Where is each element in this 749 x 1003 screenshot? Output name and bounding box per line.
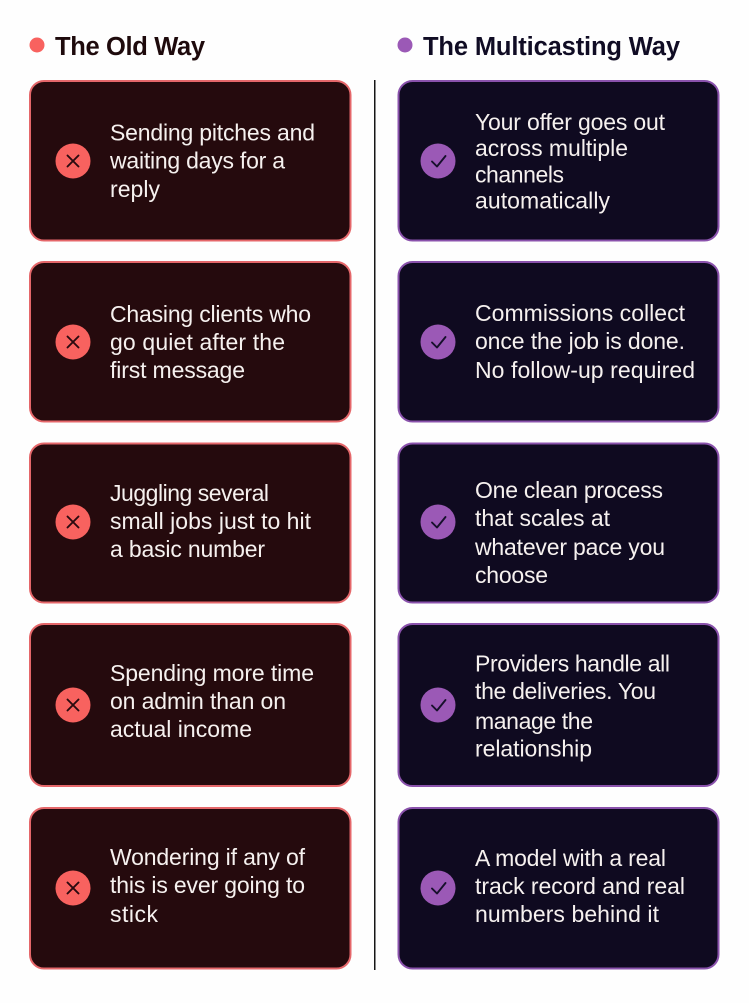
text: multicasting way 5: A model with a real bbox=[475, 845, 666, 871]
text: old way 3: Juggling several bbox=[110, 480, 269, 506]
text: multicasting way 1: automatically bbox=[475, 188, 610, 214]
panel: old way 3 bbox=[30, 444, 350, 602]
text: old way 1: Sending pitches and bbox=[110, 120, 315, 146]
icon: cross bbox=[56, 870, 90, 906]
text: multicasting way 5 bbox=[475, 845, 685, 927]
text: multicasting way 4: relationship bbox=[475, 736, 592, 762]
text: old way 2: go quiet after the bbox=[110, 329, 285, 355]
panel: multicasting way 5 bbox=[398, 808, 718, 968]
text: old way 3: small jobs just to hit bbox=[110, 508, 312, 534]
text: old way 3: a basic number bbox=[110, 536, 265, 562]
text: multicasting way 1: channels bbox=[475, 162, 564, 188]
text: old way 3 bbox=[110, 480, 312, 562]
heading: The Old Way: The Old Way bbox=[55, 33, 206, 61]
center divider line bbox=[374, 80, 376, 970]
heading: The Multicasting Way: The Multicasting Way bbox=[423, 33, 681, 61]
text: old way 4: on admin than on bbox=[110, 688, 286, 714]
panel: multicasting way 2 bbox=[398, 262, 718, 422]
text: multicasting way 1 bbox=[475, 109, 666, 214]
panel: multicasting way 4 bbox=[398, 624, 718, 786]
text: multicasting way 3: One clean process bbox=[475, 477, 663, 503]
text: old way 4 bbox=[110, 660, 314, 742]
text: multicasting way 3: choose bbox=[475, 562, 548, 588]
icon: check bbox=[420, 504, 456, 540]
icon: check bbox=[420, 688, 456, 722]
text: old way 5: stick bbox=[110, 901, 158, 927]
text: old way 4: actual income bbox=[110, 716, 252, 742]
text: old way 5: this is ever going to bbox=[110, 872, 305, 898]
text: multicasting way 2: Commissions collect bbox=[475, 300, 686, 326]
icon: check bbox=[420, 144, 456, 178]
text: old way 5 bbox=[110, 844, 306, 927]
icon: check bbox=[420, 870, 456, 906]
text: old way 2: Chasing clients who bbox=[110, 301, 311, 327]
text: multicasting way 2: once the job is done. bbox=[475, 328, 685, 354]
text: multicasting way 1: across multiple bbox=[475, 135, 628, 161]
text: old way 4: Spending more time bbox=[110, 660, 314, 686]
panel: multicasting way 1 bbox=[398, 81, 718, 240]
text: old way 2: first message bbox=[110, 357, 245, 383]
text: multicasting way 4: the deliveries. You bbox=[475, 678, 656, 704]
text: multicasting way 3 bbox=[474, 477, 665, 588]
text: multicasting way 1: Your offer goes out bbox=[475, 109, 666, 135]
icon: cross bbox=[56, 324, 90, 360]
text: old way 1 bbox=[109, 120, 315, 202]
icon: cross bbox=[56, 504, 90, 540]
icon: check bbox=[420, 324, 456, 360]
text: multicasting way 3: whatever pace you bbox=[474, 534, 665, 560]
text: multicasting way 5: track record and real bbox=[475, 873, 685, 899]
text: old way 5: Wondering if any of bbox=[110, 844, 306, 870]
panel: old way 4 bbox=[30, 624, 350, 786]
panel: old way 2 bbox=[30, 262, 350, 422]
text: multicasting way 4: manage the bbox=[475, 708, 593, 734]
text: multicasting way 5: numbers behind it bbox=[475, 901, 660, 927]
panel: multicasting way 3 bbox=[398, 444, 718, 602]
text: multicasting way 4: Providers handle all bbox=[475, 650, 670, 676]
text: multicasting way 4 bbox=[475, 650, 670, 762]
text: multicasting way 2 bbox=[475, 300, 695, 383]
text: old way 2 bbox=[110, 301, 311, 383]
text: multicasting way 2: No follow-up required bbox=[475, 357, 695, 383]
icon: cross bbox=[56, 688, 90, 722]
text: old way 1: waiting days for a bbox=[109, 148, 285, 174]
icon: cross bbox=[56, 144, 90, 178]
text: multicasting way 3: that scales at bbox=[475, 505, 611, 531]
panel: old way 1 bbox=[30, 81, 350, 240]
text: old way 1: reply bbox=[110, 176, 160, 202]
panel: old way 5 bbox=[30, 808, 350, 968]
